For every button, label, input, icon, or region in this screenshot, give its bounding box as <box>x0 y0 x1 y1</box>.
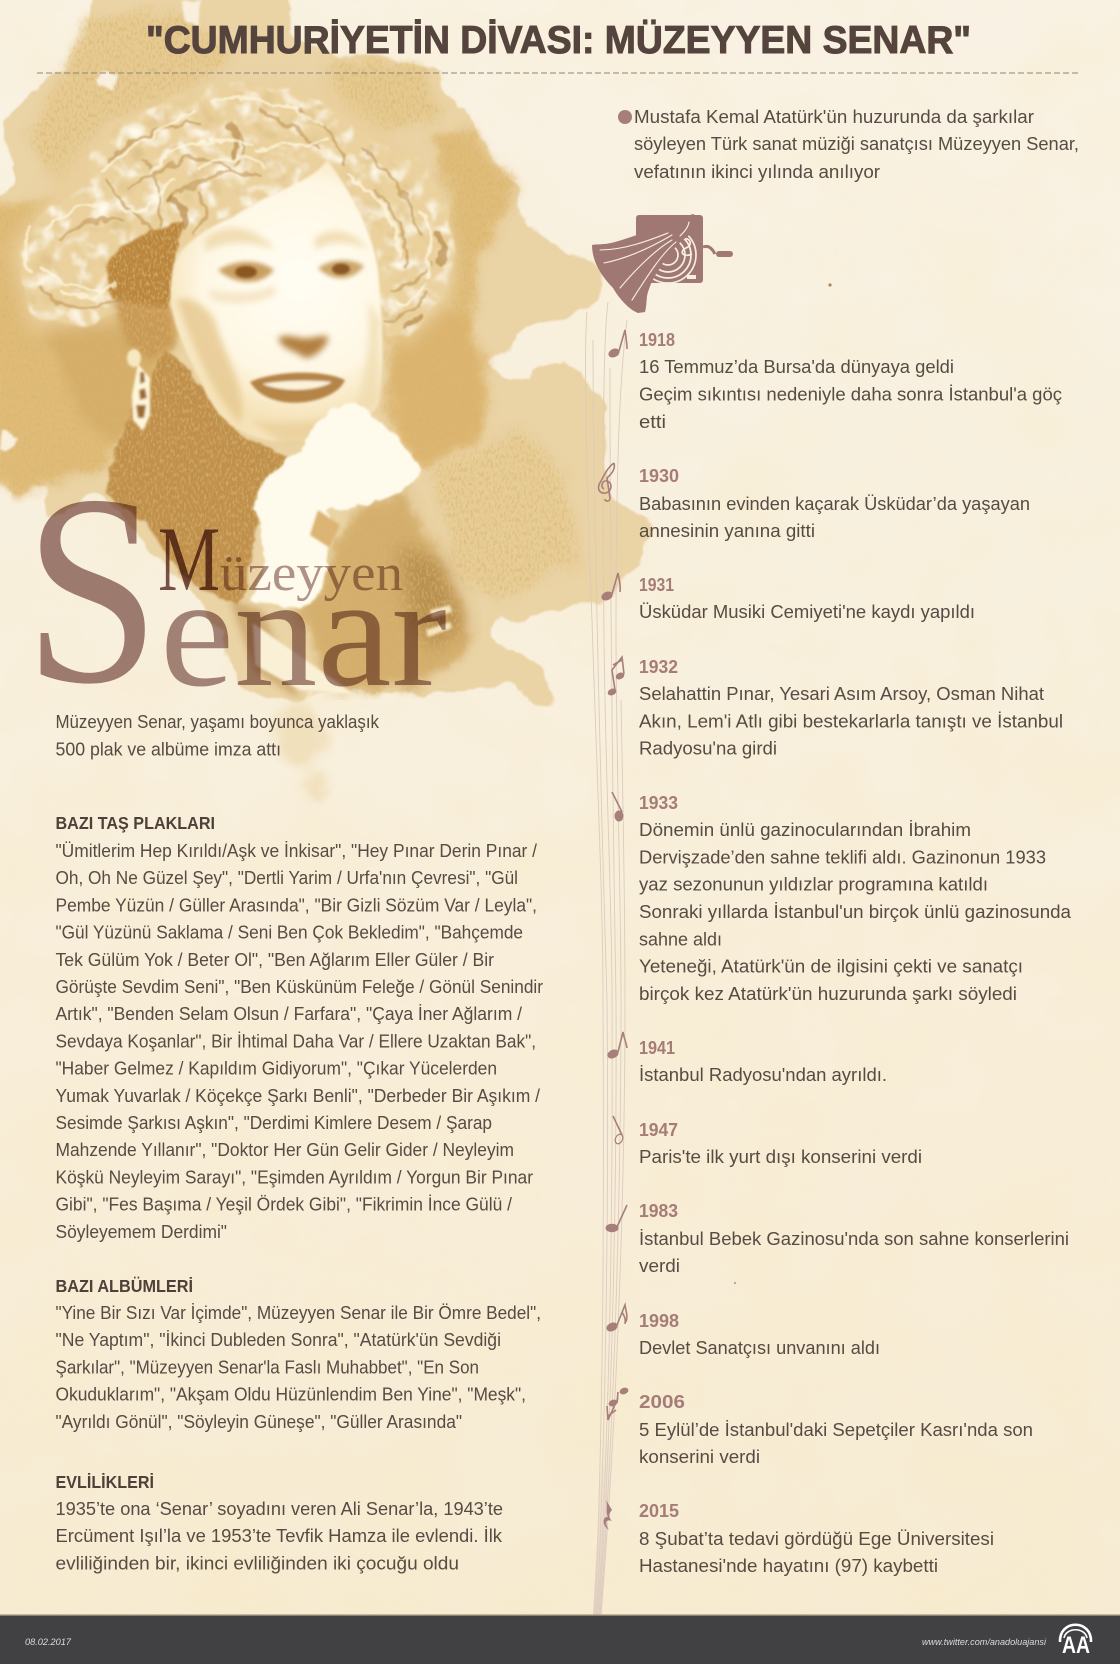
event 2006: 5 Eylül’de İstanbul'daki Sepetçiler Kasrı'nda son <box>639 1419 1033 1440</box>
event 1918: etti <box>639 411 666 432</box>
icon: rest 2015 <box>604 1500 612 1530</box>
lead text: 500 plak ve albüme imza attı <box>56 739 281 760</box>
section: albums <box>56 1276 541 1432</box>
icon: note 1918 <box>607 330 627 359</box>
section: stone records: "Gül Yüzünü Saklama / Seni Ben Çok Bekledim", "Bahçemde <box>56 922 523 943</box>
section: stone records: Artık", "Benden Selam Olsun / Farfara", "Çaya İner Ağlarım / <box>56 1003 523 1024</box>
event 1933: yaz sezonunun yıldızlar programına katıldı <box>639 874 988 895</box>
event 1932: 1932 <box>639 657 678 677</box>
lead text <box>56 711 380 760</box>
name lettering: Müzeyyen: M <box>158 508 220 610</box>
section: stone records: Köşkü Neyleyim Sarayı", "Eşimden Ayrıldım / Yorgun Bir Pınar <box>56 1166 533 1187</box>
earring <box>127 349 150 431</box>
event 1947 <box>639 1120 922 1167</box>
intro text with bullet: söyleyen Türk sanat müziği sanatçısı Müzeyyen Senar, <box>634 133 1079 154</box>
event 1931: 1931 <box>639 575 674 595</box>
event 1933: Yeteneği, Atatürk'ün de ilgisini çekti ve sanatçı <box>639 956 1023 977</box>
event 1932: Akın, Lem'i Atlı gibi bestekarlarla tanıştı ve İstanbul <box>639 710 1063 731</box>
section: stone records: Görüşte Sevdim Seni", "Ben Küskünüm Feleğe / Gönül Senindir <box>56 976 543 997</box>
event 2015 <box>639 1501 994 1576</box>
twitter address: www.twitter.com/anadoluajansi <box>922 1637 1047 1647</box>
hair curls <box>24 98 443 325</box>
hand holding microphone <box>250 403 452 695</box>
section: stone records: Pembe Yüzün / Güller Arasında", "Bir Gizli Sözüm Var / Leyla", <box>56 894 537 915</box>
portrait with watercolor stain <box>0 0 652 799</box>
chest and neck shadow <box>105 350 290 605</box>
dress <box>230 490 472 700</box>
event 1918: Geçim sıkıntısı nedeniyle daha sonra İstanbul'a göç <box>639 384 1062 405</box>
section: stone records: "Haber Gelmez / Kapıldım Gidiyorum", "Çıkar Yücelerden <box>56 1058 497 1079</box>
event 1933 <box>639 793 1072 1004</box>
icon: note 1933 <box>612 792 624 822</box>
event 1932: Selahattin Pınar, Yesari Asım Arsoy, Osman Nihat <box>639 683 1044 704</box>
section: stone records: BAZI TAŞ PLAKLARI <box>56 813 215 833</box>
name lettering: Senar: enar <box>160 544 447 720</box>
section: marriages: EVLİLİKLERİ <box>56 1472 154 1492</box>
event 1930 <box>639 466 1030 541</box>
mouth <box>250 373 345 403</box>
event 1933: birçok kez Atatürk'ün huzurunda şarkı söyledi <box>639 983 1017 1004</box>
note icons <box>599 330 629 1530</box>
section: stone records: Yumak Yuvarlak / Köçekçe Şarkı Benli", "Derbeder Bir Aşıkım / <box>56 1085 541 1106</box>
footer bar <box>0 1614 1120 1664</box>
event 2015: Hastanesi'nde hayatını (97) kaybetti <box>639 1555 938 1576</box>
hair underlay <box>10 86 454 350</box>
nose <box>278 336 328 358</box>
section: albums: "Ayrıldı Gönül", "Söyleyin Güneşe", "Güller Arasında" <box>56 1411 462 1432</box>
event 2015: 8 Şubat’ta tedavi gördüğü Ege Üniversitesi <box>639 1528 994 1549</box>
name lettering: Senar: S <box>24 439 160 740</box>
event 2006: 2006 <box>639 1392 685 1412</box>
section: stone records: Oh, Oh Ne Güzel Şey", "Dertli Yarim / Urfa'nın Çevresi", "Gül <box>56 867 518 888</box>
section: albums: BAZI ALBÜMLERİ <box>56 1276 193 1296</box>
section: stone records: Tek Gülüm Yok / Beter Ol", "Ben Ağlarım Eller Güler / Bir <box>56 949 494 970</box>
event 1941: İstanbul Radyosu'ndan ayrıldı. <box>639 1064 887 1085</box>
event 1998 <box>639 1311 880 1358</box>
section: stone records <box>56 813 543 1242</box>
icon: note 1998 <box>605 1305 627 1333</box>
section: albums: Şarkılar", "Müzeyyen Senar'la Faslı Muhabbet", "En Son <box>56 1356 479 1377</box>
event 1983: İstanbul Bebek Gazinosu'nda son sahne konserlerini <box>639 1228 1069 1249</box>
event 1933: Dönemin ünlü gazinocularından İbrahim <box>639 819 971 840</box>
section: albums: Okuduklarım", "Akşam Oldu Hüzünlendim Ben Yine", "Meşk", <box>56 1384 526 1405</box>
event 1932: Radyosu'na girdi <box>639 738 777 759</box>
event 1930: 1930 <box>639 466 679 486</box>
name lettering: Müzeyyen <box>158 508 403 610</box>
title: "CUMHURİYETİN DİVASI: MÜZEYYEN SENAR" <box>146 19 971 62</box>
icon: double note 1932 <box>607 657 625 697</box>
intro text with bullet <box>618 106 1079 182</box>
icon: hollow note 1947 <box>613 1116 624 1145</box>
event 1918: 1918 <box>639 330 675 350</box>
section: stone records: "Ümitlerim Hep Kırıldı/Aşk ve İnkisar", "Hey Pınar Derin Pınar / <box>56 840 538 861</box>
hair shadow behind ear <box>105 222 182 360</box>
icon: note 1983 <box>606 1205 627 1232</box>
event 1983 <box>639 1201 1069 1276</box>
event 1947: Paris'te ilk yurt dışı konserini verdi <box>639 1146 922 1167</box>
icon: note 1931 <box>600 573 620 602</box>
event 1931 <box>639 575 975 622</box>
event 1933: sahne aldı <box>639 928 722 949</box>
event 1941 <box>639 1038 887 1085</box>
event 1932 <box>639 657 1063 759</box>
logo: AA: AA <box>1062 1632 1090 1659</box>
section: marriages: Ercüment Işıl’la ve 1953’te Tevfik Hamza ile evlendi. İlk <box>56 1525 503 1546</box>
lead text: Müzeyyen Senar, yaşamı boyunca yaklaşık <box>56 711 380 732</box>
outer light stain <box>0 0 652 710</box>
music staff lines <box>586 302 627 1615</box>
logo: AA <box>1060 1625 1091 1659</box>
name lettering: Müzeyyen: üzeyyen <box>220 545 403 602</box>
event 1933: Dervişzade’den sahne teklifi aldı. Gazinonun 1933 <box>639 846 1046 867</box>
section: albums: "Yine Bir Sızı Var İçimde", Müzeyyen Senar ile Bir Ömre Bedel", <box>56 1302 541 1323</box>
section: albums: "Ne Yaptım", "İkinci Dubleden Sonra", "Atatürk'ün Sevdiği <box>56 1329 501 1350</box>
event 2015: 2015 <box>639 1501 679 1521</box>
icon: treble clef 1930 <box>599 463 614 501</box>
face shading <box>176 228 380 445</box>
timeline <box>639 330 1072 1576</box>
event 2006: konserini verdi <box>639 1446 760 1467</box>
event 1930: annesinin yanına gitti <box>639 520 815 541</box>
staff base wedge <box>593 1430 614 1615</box>
event 1933: 1933 <box>639 793 678 813</box>
cream holes in stain <box>0 0 200 452</box>
event 1930: Babasının evinden kaçarak Üsküdar’da yaşayan <box>639 493 1030 514</box>
section: stone records: Söyleyemem Derdimi" <box>56 1221 227 1242</box>
section: stone records: Sesimde Şarkısı Aşkın", "Derdimi Kimlere Desem / Şarap <box>56 1112 492 1133</box>
section: marriages: evliliğinden bir, ikinci evliliğinden iki çocuğu oldu <box>56 1552 459 1573</box>
intro text with bullet: Mustafa Kemal Atatürk'ün huzurunda da şarkılar <box>634 106 1034 127</box>
section: stone records: Mahzende Yıllanır", "Doktor Her Gün Gelir Gider / Neyleyim <box>56 1139 514 1160</box>
darker stain layers <box>0 10 580 600</box>
event 1983: verdi <box>639 1255 680 1276</box>
event 1931: Üsküdar Musiki Cemiyeti'ne kaydı yapıldı <box>639 601 975 622</box>
face <box>171 160 382 441</box>
event 2006 <box>639 1392 1033 1467</box>
event 1998: 1998 <box>639 1311 679 1331</box>
section: stone records: Gibi", "Fes Başıma / Yeşil Ördek Gibi", "Fikrimin İnce Gülü / <box>56 1194 513 1215</box>
event 1983: 1983 <box>639 1201 678 1221</box>
intro text with bullet: vefatının ikinci yılında anılıyor <box>634 161 880 182</box>
section: marriages <box>56 1472 503 1573</box>
date: 08.02.2017 <box>25 1637 72 1647</box>
section: marriages: 1935’te ona ‘Senar’ soyadını veren Ali Senar’la, 1943’te <box>56 1498 503 1519</box>
section: stone records: Sevdaya Koşanlar", Bir İhtimal Daha Var / Ellere Uzaktan Bak", <box>56 1030 536 1051</box>
eyes and brows <box>218 260 364 282</box>
event 1947: 1947 <box>639 1120 678 1140</box>
event 1998: Devlet Sanatçısı unvanını aldı <box>639 1337 880 1358</box>
lower stain drips <box>274 703 326 799</box>
icon: joined notes 2006 <box>607 1386 629 1420</box>
icon: gramophone with veil <box>592 214 733 313</box>
name lettering: Senar <box>24 439 447 740</box>
event 1933: Sonraki yıllarda İstanbul'un birçok ünlü gazinosunda <box>639 901 1072 922</box>
event 1941: 1941 <box>639 1038 675 1058</box>
icon: note 1941 <box>606 1032 627 1060</box>
hair <box>22 85 451 337</box>
event 1918: 16 Temmuz’da Bursa'da dünyaya geldi <box>639 356 954 377</box>
event 1918 <box>639 330 1062 432</box>
